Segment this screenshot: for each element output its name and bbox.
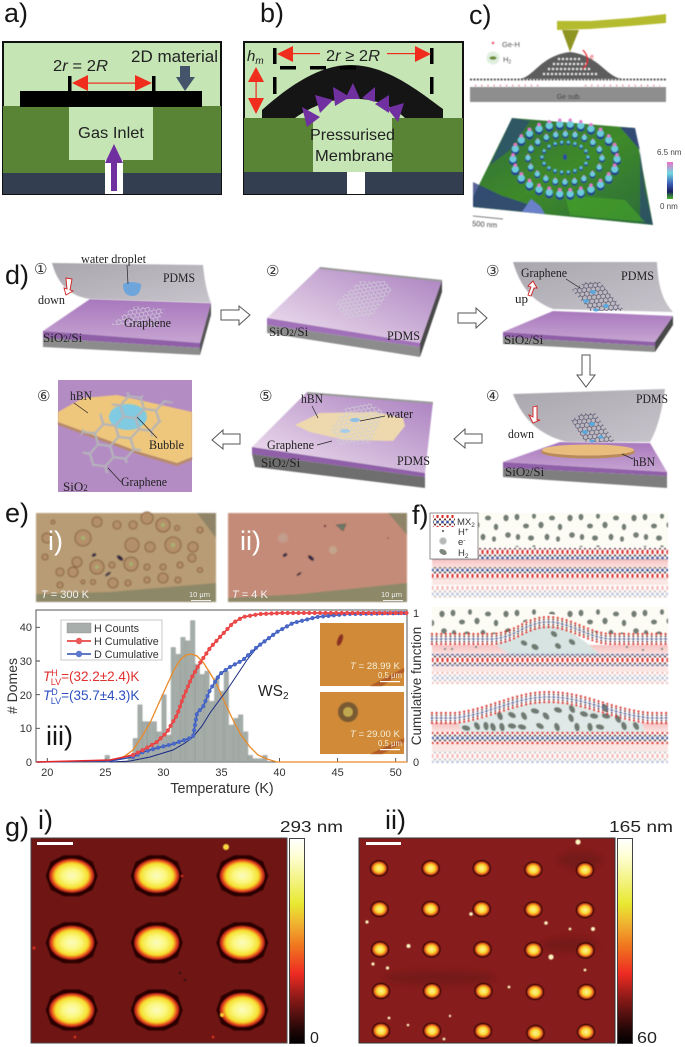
deuterium fit annotation: =(35.7±4.3)K [61, 688, 139, 703]
arrow: height [248, 67, 264, 114]
arrow: step 1 to 2 [221, 306, 250, 325]
step 6 background [58, 380, 192, 492]
3D AFM image [473, 118, 653, 225]
clear above dome [490, 614, 612, 636]
dark blue fit [110, 632, 277, 762]
legend c: H [503, 55, 508, 64]
legend entries: 2 [471, 522, 475, 529]
ii label: ii) [385, 805, 406, 835]
panel f: bubble formation schematic [412, 500, 668, 763]
2D material flake [20, 91, 202, 107]
step 6 labels: Graphene [121, 474, 167, 489]
step 6 labels: SiO2 [63, 479, 88, 494]
hydrogen fit annotation: T [43, 669, 53, 684]
hBN flake 6 [58, 395, 192, 466]
red cumulative data [37, 613, 407, 762]
2D material label: 2D material [131, 48, 218, 66]
secondary axis tick labels [413, 608, 419, 769]
graphene bubble cross-section: e [590, 54, 594, 61]
dome rings in photo i [42, 512, 203, 588]
panel d label: d) [5, 260, 29, 290]
step 5 labels: ⑤ [259, 387, 272, 405]
hydrogen fit annotation: H [51, 668, 58, 678]
pressurised membrane label: Membrane [315, 148, 394, 165]
height label: m [255, 56, 264, 67]
x axis tick labels: 30 [157, 767, 170, 779]
step 3 labels: ③ [486, 262, 499, 280]
step 5 labels: hBN [301, 391, 324, 406]
diagram b background [244, 42, 463, 194]
arrow: up [528, 281, 537, 296]
graphene lattice 6 [77, 392, 173, 474]
legend entries [438, 517, 475, 560]
width marker ticks [68, 76, 156, 91]
inset photo 28.99 K [320, 623, 404, 686]
iii label: iii) [46, 721, 73, 751]
x axis title: Temperature (K) [170, 781, 274, 797]
map ii bright specks [365, 839, 595, 1040]
step 5 labels: SiO2/Si [261, 455, 301, 470]
gas molecules in middle bubble [444, 630, 663, 651]
hBN flake 5 [295, 412, 405, 441]
deuterium fit annotation: T [43, 688, 53, 703]
legend entries: H [458, 548, 465, 559]
scale bar 500 nm: 500 nm [472, 219, 497, 230]
photo ii labels: T = 4 K [232, 589, 268, 601]
map i domes [46, 855, 268, 1030]
colour bar i max: 293 nm [280, 819, 343, 836]
chart legend: D Cumulative [94, 649, 159, 661]
y axis tick labels [20, 622, 32, 769]
legend entries: 2 [465, 553, 469, 560]
background top [432, 513, 668, 547]
x axis tick labels: 35 [215, 767, 228, 779]
panel a: flat membrane over gas inlet [3, 0, 221, 194]
histogram bars [105, 620, 267, 762]
schematic middle: small bubble [432, 607, 668, 684]
pressurised membrane label [310, 127, 395, 165]
legend c: Ge-H [502, 40, 520, 49]
y axis title: # Domes [4, 658, 20, 714]
leader lines 6 [74, 403, 157, 482]
step 4 labels: down [508, 426, 534, 441]
x axis tick labels: 40 [273, 767, 286, 779]
step 1 labels [34, 251, 195, 345]
step 4 labels: hBN [633, 454, 656, 469]
arrow: down 1 [64, 278, 73, 295]
dashed height box [273, 48, 434, 94]
x axis tick labels: 25 [99, 767, 112, 779]
schematic bottom: full bubble [432, 692, 668, 763]
step 3 labels: SiO2/Si [504, 332, 544, 347]
step 5 labels: water [386, 406, 414, 421]
x axis tick labels: 50 [390, 767, 402, 779]
map ii background [359, 838, 615, 1043]
pink bands middle [432, 645, 668, 672]
panel g: AFM maps of domes [5, 805, 673, 1047]
step 4 labels [486, 387, 668, 479]
step 4 labels: SiO2/Si [505, 464, 545, 479]
arrow: step 3 to 4 [577, 355, 595, 387]
step 3 labels [486, 262, 654, 347]
map ii dark patches [385, 852, 602, 985]
step 2 labels: ② [266, 262, 279, 280]
substrate layers [3, 106, 221, 194]
step 1 [34, 251, 211, 355]
photo i labels: 10 μm [189, 590, 210, 599]
legend entries: + [465, 527, 469, 534]
curved layer bottom [432, 692, 668, 723]
substrate 5 [252, 392, 433, 488]
legend c: 2 [508, 60, 511, 66]
substrate layers b [244, 118, 463, 194]
chart legend [61, 620, 162, 661]
step 6 [37, 380, 192, 494]
graphene bubble cross-section [520, 50, 622, 79]
panel c label: c) [469, 0, 492, 30]
legend entries: H [458, 527, 465, 538]
i label: i) [38, 805, 53, 835]
scale bar i [37, 842, 73, 845]
axes frame [36, 610, 407, 762]
trapped gas bottom [458, 702, 645, 733]
arrow: down 4 [529, 406, 540, 423]
substrate 3 [503, 311, 673, 352]
hBN flake 4 [541, 444, 635, 459]
panel c: AFM tip and dome array [469, 0, 682, 230]
photo i at 300 K [36, 512, 216, 602]
trapped gas middle [495, 626, 600, 655]
photo ii at 4 K [228, 513, 407, 602]
background middle [432, 607, 668, 637]
secondary axis tick labels: 0 [413, 757, 419, 769]
step 1 labels: SiO2/Si [43, 330, 83, 345]
colour bar ii [618, 838, 632, 1044]
step 4 [486, 387, 668, 488]
scale bar ii [366, 842, 401, 845]
substrate 1 [43, 299, 211, 355]
substrate 4 [503, 442, 667, 488]
step 3 [486, 262, 673, 352]
colour bar c [657, 148, 682, 211]
pressure arrowheads [302, 83, 404, 127]
step 4 labels: ④ [486, 387, 499, 405]
pressurised membrane label: Pressurised [310, 127, 395, 144]
photo ii base [228, 513, 407, 602]
height label: h [247, 48, 255, 65]
AFM map i [31, 805, 343, 1047]
photo ii labels [232, 526, 403, 601]
colour bar c: 0 nm [660, 202, 678, 211]
panel e label: e) [5, 498, 29, 528]
photo i labels: i) [48, 526, 63, 556]
bubble [109, 404, 147, 430]
substrate 2 [267, 267, 442, 357]
chart iii: histogram and cumulative curves [4, 608, 424, 797]
schematic top: proton intercalation start [432, 513, 668, 598]
gas inlet cavity [69, 107, 153, 160]
lower layers bottom [432, 732, 668, 763]
PDMS sheet 1 [52, 263, 211, 303]
PDMS sheet 4 [513, 389, 665, 442]
deuterium fit annotation: LV [51, 696, 61, 706]
photo ii labels: ii) [240, 526, 261, 556]
arrow: step 2 to 3 [458, 308, 487, 328]
gas inlet label: Gas Inlet [78, 125, 145, 142]
step 5 labels: PDMS [397, 453, 430, 468]
AFM map ii [359, 805, 673, 1047]
WS2 label: WS [258, 683, 283, 700]
arrow: gas flow [105, 144, 123, 194]
step 6 labels: ⑥ [37, 387, 50, 405]
inset photo 29.00 K [320, 692, 404, 754]
step 1 labels: ① [34, 260, 47, 278]
hydrogen molecules middle [432, 607, 668, 634]
panel b: pressurised membrane [244, 0, 463, 194]
step 2 [266, 262, 442, 357]
gas molecules in bottom bubble [461, 703, 640, 732]
map ii domes [370, 860, 596, 1041]
map i background [31, 838, 287, 1043]
step 5 [252, 387, 433, 488]
orange gaussian fit [117, 654, 407, 762]
panel d: transfer process [5, 251, 673, 494]
legend entries: MX [457, 517, 471, 528]
y axis tick labels: 40 [20, 622, 32, 634]
legend f [430, 513, 478, 560]
y axis tick labels: 0 [26, 757, 32, 769]
map i specks [33, 844, 229, 1038]
inset photo 28.99 K: T = 28.99 K [350, 661, 400, 672]
y axis tick labels: 30 [20, 656, 32, 668]
colour bar i min: 0 [310, 1030, 319, 1047]
step 6 labels: hBN [70, 388, 93, 403]
colour bar c: 6.5 nm [657, 148, 682, 157]
step 1 labels: PDMS [163, 270, 195, 285]
germanium substrate: Ge sub. [557, 94, 581, 101]
graphene sheet 2 [335, 281, 392, 318]
chart legend: H Cumulative [94, 636, 159, 648]
colour bar i [290, 838, 304, 1044]
hydrogen fit annotation: =(32.2±2.4)K [61, 669, 139, 684]
step 1 labels: Graphene [124, 315, 171, 330]
lower layers middle [432, 654, 668, 684]
step 3 labels: PDMS [621, 268, 654, 283]
step 1 labels: down [38, 292, 65, 307]
dome width label: 2r ≥ 2R [326, 48, 380, 65]
x axis tick labels: 45 [331, 767, 344, 779]
step 4 labels: PDMS [636, 391, 668, 406]
step 3 labels: Graphene [521, 265, 567, 280]
legend entries: - [463, 537, 465, 544]
step 5 labels: Graphene [267, 437, 314, 452]
inset photo 28.99 K: 0.5 μm [378, 671, 402, 680]
arrow: dome width left [277, 46, 320, 62]
step 2 labels [266, 262, 420, 343]
colour bar ii min: 60 [637, 1030, 657, 1047]
panel g label: g) [5, 812, 29, 842]
step 6 labels: Bubble [149, 437, 184, 452]
inset photo 29.00 K: 0.5 μm [378, 739, 402, 748]
dome rings [513, 120, 617, 196]
graphene sheet 3 [566, 279, 625, 312]
inset photo 29.00 K: T = 29.00 K [350, 729, 400, 740]
water droplet [123, 265, 141, 296]
PDMS sheet 3 [513, 262, 673, 312]
arrow: step 4 to 5 [454, 429, 482, 448]
deuterium fit annotation: D [51, 687, 58, 697]
y axis tick labels: 10 [20, 723, 32, 735]
step 5 labels [259, 387, 430, 470]
arrow: to 2D material [176, 66, 195, 91]
legend c [486, 40, 520, 66]
WS2 label: 2 [283, 691, 289, 702]
hydrogen fit annotation: LV [51, 677, 61, 687]
curved layer middle [432, 617, 668, 644]
secondary axis title: Cumulative function [409, 627, 424, 745]
arrow: step 5 to 6 [212, 430, 240, 449]
germanium substrate [470, 80, 666, 102]
step 6 labels [37, 387, 184, 494]
colour bar ii max: 165 nm [609, 819, 673, 836]
graphene sheet 4 [571, 413, 615, 442]
step 3 labels: up [515, 291, 528, 306]
photo i labels [41, 526, 211, 601]
legend entries: e [458, 537, 463, 548]
step 2 labels: PDMS [387, 328, 420, 343]
blue cumulative data [37, 613, 407, 762]
photo i base [36, 512, 216, 602]
photo i labels: T = 300 K [41, 589, 90, 601]
panel e: WS2 domes [4, 498, 424, 797]
AFM cantilever [557, 14, 666, 52]
secondary axis tick labels: 1 [413, 608, 419, 620]
diameter label: 2r = 2R [53, 58, 108, 75]
scale bar 500 nm [472, 216, 503, 230]
panel f label: f) [412, 500, 428, 530]
diagram a background [3, 42, 221, 194]
legend lattice swatch [433, 515, 455, 527]
step 1 labels: water droplet [81, 251, 146, 266]
graphene sheet 1 [110, 306, 165, 328]
hydrogen molecules top [478, 514, 668, 547]
chart legend: H Counts [94, 623, 140, 635]
x axis tick labels [41, 767, 402, 779]
step 2 labels: SiO2/Si [269, 324, 309, 339]
y axis tick labels: 20 [20, 690, 32, 702]
graphene sheet 5 [312, 403, 385, 445]
arrow: dome width right [387, 46, 431, 62]
layers top [432, 548, 668, 598]
x axis tick labels: 20 [41, 767, 53, 779]
arrow: diameter [72, 75, 152, 91]
pink bands bottom [432, 723, 668, 751]
photo ii labels: 10 μm [381, 590, 402, 599]
bulged membrane [262, 65, 443, 118]
